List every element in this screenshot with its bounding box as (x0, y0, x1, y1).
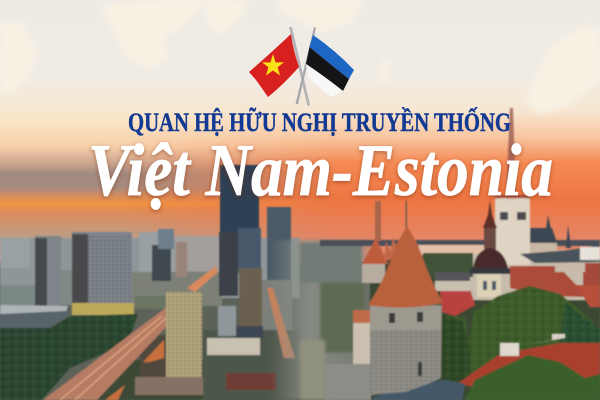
horizon water (320, 240, 600, 246)
flag: Vietnam (249, 34, 299, 97)
background: world map (0, 0, 600, 115)
base dark (370, 256, 600, 400)
middle fade (270, 240, 380, 400)
side road (267, 288, 295, 358)
stadium podium (0, 306, 68, 328)
main trees (442, 286, 600, 385)
heading: traditional friendship: QUAN HỆ HỮU NGHỊ TRUYỀN THỐNG (128, 108, 511, 137)
apartment tower left (35, 236, 61, 307)
flags (249, 27, 354, 106)
distant haze blocks (0, 238, 300, 298)
foreground red roof (457, 334, 600, 388)
right city: Tallinn old town (320, 108, 600, 400)
foreground tree (465, 355, 600, 400)
baroque bell tower (470, 200, 510, 297)
small dark towers (152, 245, 171, 281)
chimney (375, 201, 381, 241)
tall dark tower (220, 165, 259, 267)
background: sunset sky (0, 0, 600, 262)
brown tower (239, 268, 262, 327)
tower right (267, 207, 291, 281)
red roofs (510, 266, 588, 297)
stone round tower (368, 226, 443, 395)
lower ground (97, 360, 302, 400)
red roofs (226, 373, 276, 390)
cream apartment tower (135, 292, 203, 395)
white colonnade building (207, 338, 260, 355)
foliage behind (423, 253, 473, 277)
left city: Hanoi skyline (0, 165, 302, 400)
church tower and spire (495, 108, 600, 265)
flag poles (289, 27, 310, 106)
flag star (262, 54, 284, 76)
white annex (353, 310, 370, 368)
greenery (0, 314, 138, 400)
spire mast (406, 201, 407, 228)
big apartment block (72, 232, 134, 315)
base ground (0, 238, 300, 400)
flag: Estonia (306, 35, 354, 97)
blue roof (373, 380, 465, 400)
city wall (325, 364, 371, 400)
highway (43, 306, 168, 400)
back tower (362, 238, 398, 283)
